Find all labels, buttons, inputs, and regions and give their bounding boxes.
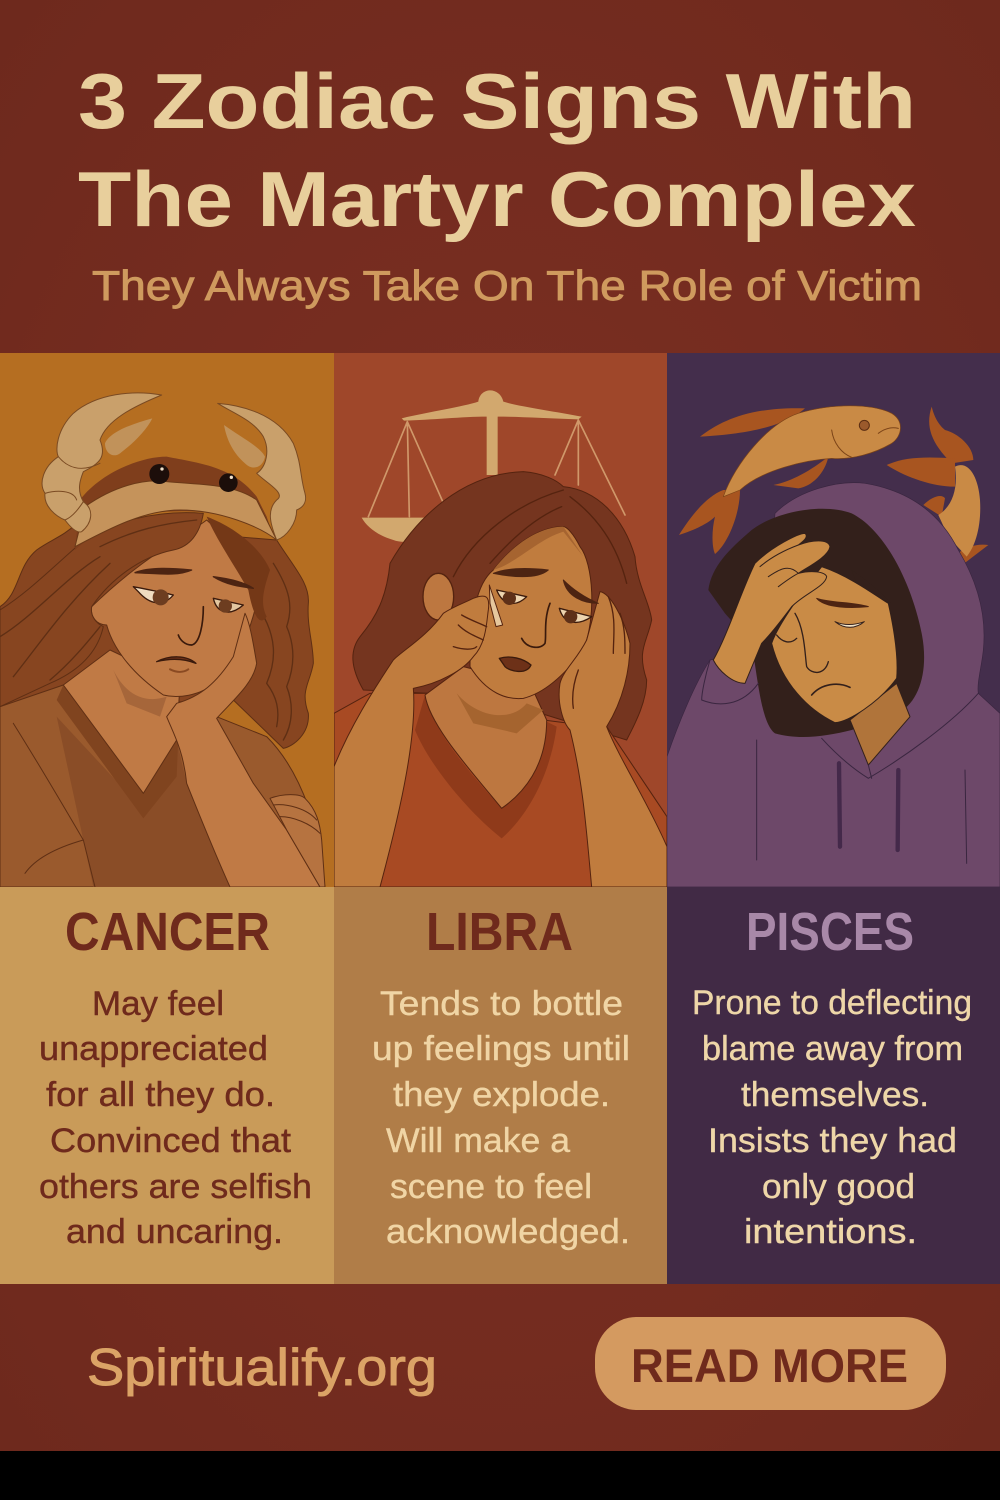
text block: Cancer description: and uncaring. [66,1213,283,1251]
torso shading [57,717,233,887]
website name: Spiritualify.org [87,1339,437,1397]
face [470,527,592,699]
fish right [887,407,988,567]
title: The Martyr Complex [78,155,916,243]
neck [63,650,180,793]
hoodie [667,483,1000,887]
shirt [0,685,325,887]
left arm and hand [334,596,489,887]
crab eyes [149,464,169,484]
text block: Libra description: they explode. [393,1076,610,1114]
shirt collar band [415,695,557,838]
folded hand [270,795,325,887]
text block: Cancer description: Convinced that [50,1122,292,1160]
drawstrings [839,763,898,850]
title [78,57,916,243]
panel: Pisces text [667,887,1000,1284]
text block: Pisces description [692,984,972,1251]
shirt collar band [57,685,178,818]
panel: Libra text [334,887,667,1284]
text block: Cancer description: May feel [92,985,224,1023]
text block: Cancer description [39,985,312,1251]
hair front right [207,517,270,620]
text block: Libra description: scene to feel [390,1168,592,1206]
text block: Cancer description: unappreciated [39,1030,268,1068]
read more button [595,1317,946,1410]
panel: Libra illustration [334,353,667,887]
hair front left [0,513,203,707]
heading: Pisces: PISCES [746,902,914,962]
text block: Pisces description: intentions. [744,1213,917,1251]
crab headband [75,457,273,550]
neck [850,683,910,765]
facial features [817,598,868,607]
facial features [135,568,253,588]
text block: Pisces description: Insists they had [708,1122,957,1160]
panel: Pisces illustration [667,353,1000,887]
tear tissue [489,585,503,627]
face [91,520,257,696]
text block: Libra description: acknowledged. [386,1213,630,1251]
panel: Cancer illustration [0,353,334,887]
text block: Libra description: Tends to bottle [380,985,623,1023]
text block: Pisces description: Prone to deflecting [692,984,972,1022]
hood folds and sleeve [702,660,978,863]
text block: Libra description: Will make a [386,1122,570,1160]
facial features [493,569,598,603]
arm and hand [167,613,320,887]
text block: Cancer description: others are selfish [39,1168,312,1206]
heading: Cancer: CANCER [65,902,270,962]
right arm and hand [559,592,667,887]
text block: Pisces description: themselves. [741,1076,929,1114]
bottom black strip [0,1451,1000,1500]
crab claw right [218,403,306,540]
sleeve line [13,723,95,887]
ear [423,573,454,620]
hair [353,472,652,740]
face [772,567,897,723]
fish left [679,406,900,554]
text block: Pisces description: only good [762,1168,915,1206]
hair back [0,523,313,748]
subtitle: They Always Take On The Role of Victim [92,262,922,309]
read more button: READ MORE [631,1339,908,1392]
panel: Cancer text [0,887,334,1284]
text block: Pisces description: blame away from [702,1030,963,1068]
title: 3 Zodiac Signs With [78,57,916,145]
neck [425,667,547,808]
text block: Libra description [372,985,630,1251]
crab claw left [42,393,162,532]
hair [708,509,924,737]
text block: Libra description: up feelings until [372,1030,630,1068]
hand [713,533,830,683]
text block: Cancer description: for all they do. [46,1076,275,1114]
heading: Libra: LIBRA [426,902,573,962]
shirt [334,693,667,887]
scales of justice [362,390,625,542]
